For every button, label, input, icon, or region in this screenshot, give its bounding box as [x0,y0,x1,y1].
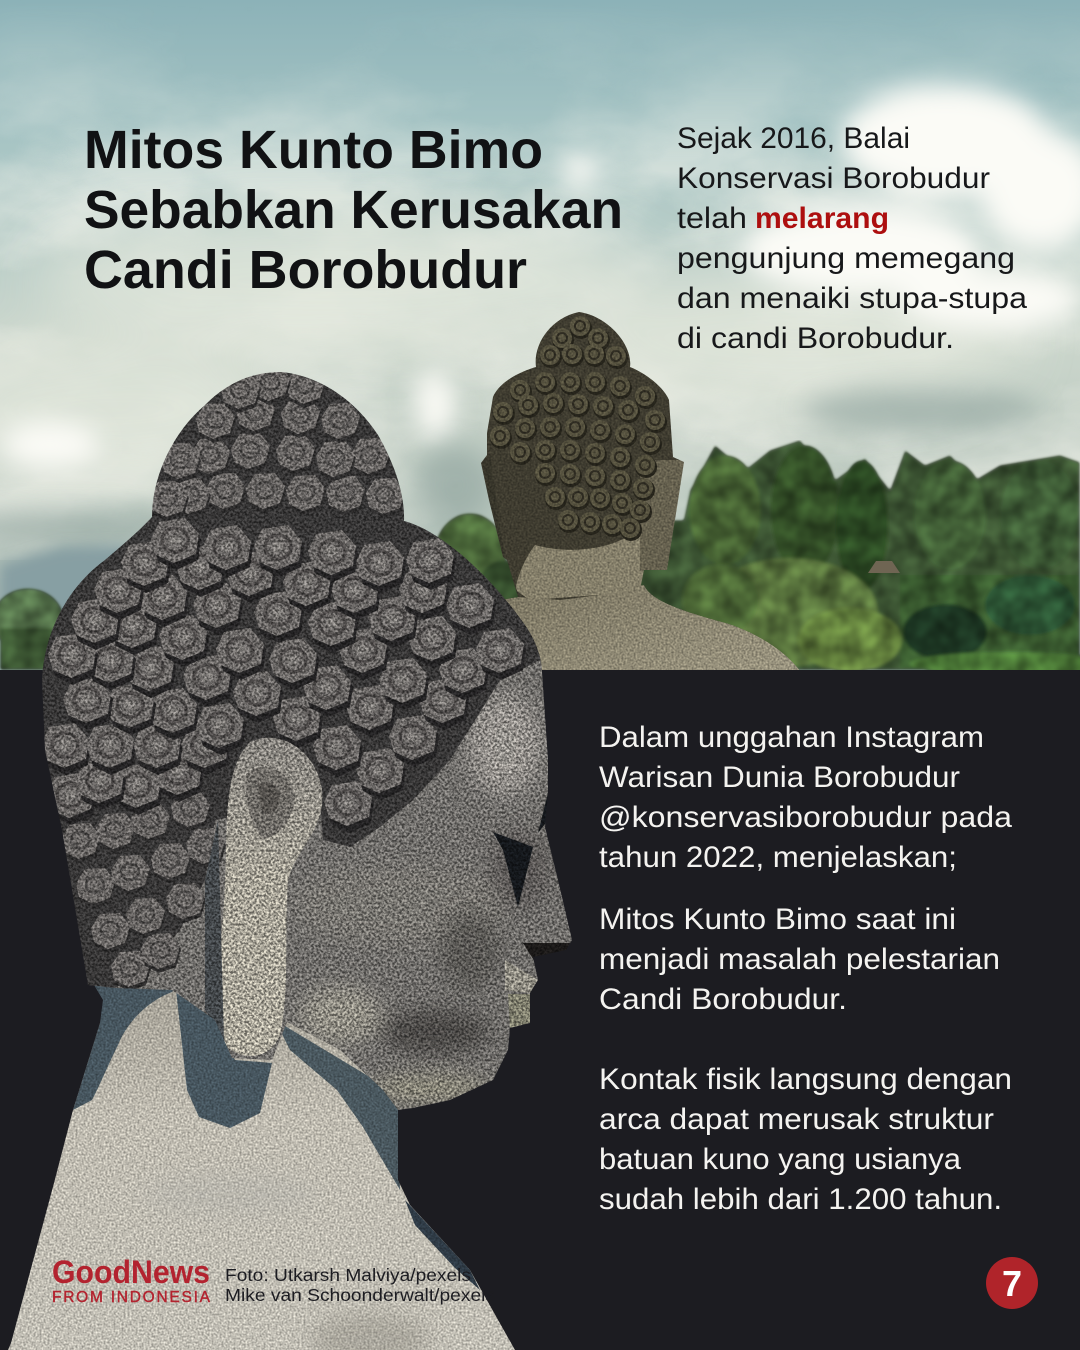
title [84,120,623,300]
body paragraph: myth problem [599,903,1000,1016]
body paragraph: myth problem: Mitos Kunto Bimo saat ini [599,903,956,936]
statue face shadows [493,832,533,907]
body paragraph: myth problem: Candi Borobudur. [599,983,847,1016]
body paragraph: Instagram source: @konservasiborobudur pada [599,801,1012,834]
face tonal modelling [290,695,550,1100]
background Buddha curls [490,316,667,541]
dark lower panel [0,670,1080,1350]
intro text block: pengunjung memegang [677,242,1015,275]
body paragraph: physical contact damage: sudah lebih dari 1.200 tahun. [599,1183,1002,1216]
body paragraph: physical contact damage [599,1063,1012,1216]
body paragraph: physical contact damage: arca dapat merusak struktur [599,1103,994,1136]
photo credits: Foto: Utkarsh Malviya/pexels [225,1265,471,1285]
photo: sky with clouds [0,0,1080,680]
body paragraph: myth problem: menjadi masalah pelestarian [599,943,1000,976]
intro text block: dan menaiki stupa-stupa [677,282,1027,315]
statue head [42,372,572,1110]
statue neck and shoulders [0,960,530,1350]
page number badge [986,1257,1038,1309]
title: Candi Borobudur [84,240,527,300]
photo: distant hill and tree line [0,440,1080,676]
title: Sebabkan Kerusakan [84,180,623,240]
body paragraph: Instagram source: Warisan Dunia Borobudur [599,761,960,794]
intro text block: Sejak 2016, Balai [677,122,910,155]
page number badge: 7 [1002,1263,1022,1304]
logo: GoodNews from Indonesia: FROM INDONESIA [52,1289,211,1306]
statue hair curls [30,360,560,991]
body paragraph: Instagram source [599,721,1012,874]
intro text block [677,122,1027,355]
photo credits: Mike van Schoonderwalt/pexels [225,1285,495,1305]
title: Mitos Kunto Bimo [84,120,543,180]
intro text block: telah [677,202,747,235]
logo: GoodNews from Indonesia [52,1254,211,1306]
body paragraph: Instagram source: tahun 2022, menjelaskan; [599,841,957,874]
intro text block: melarang [755,202,889,235]
statue ear [218,738,322,1056]
statue: foreground Buddha [0,360,590,1350]
hut in the trees [868,561,900,573]
body paragraph: Instagram source: Dalam unggahan Instagram [599,721,984,754]
smooth light area of shoulder [145,1175,430,1350]
logo: GoodNews from Indonesia: GoodNews [52,1254,210,1290]
body paragraph: physical contact damage: Kontak fisik langsung dengan [599,1063,1012,1096]
intro text block: di candi Borobudur. [677,322,954,355]
intro text block: Konservasi Borobudur [677,162,990,195]
body paragraph: physical contact damage: batuan kuno yang usianya [599,1143,961,1176]
photo credits [225,1265,495,1305]
statue: background Buddha [470,305,801,672]
